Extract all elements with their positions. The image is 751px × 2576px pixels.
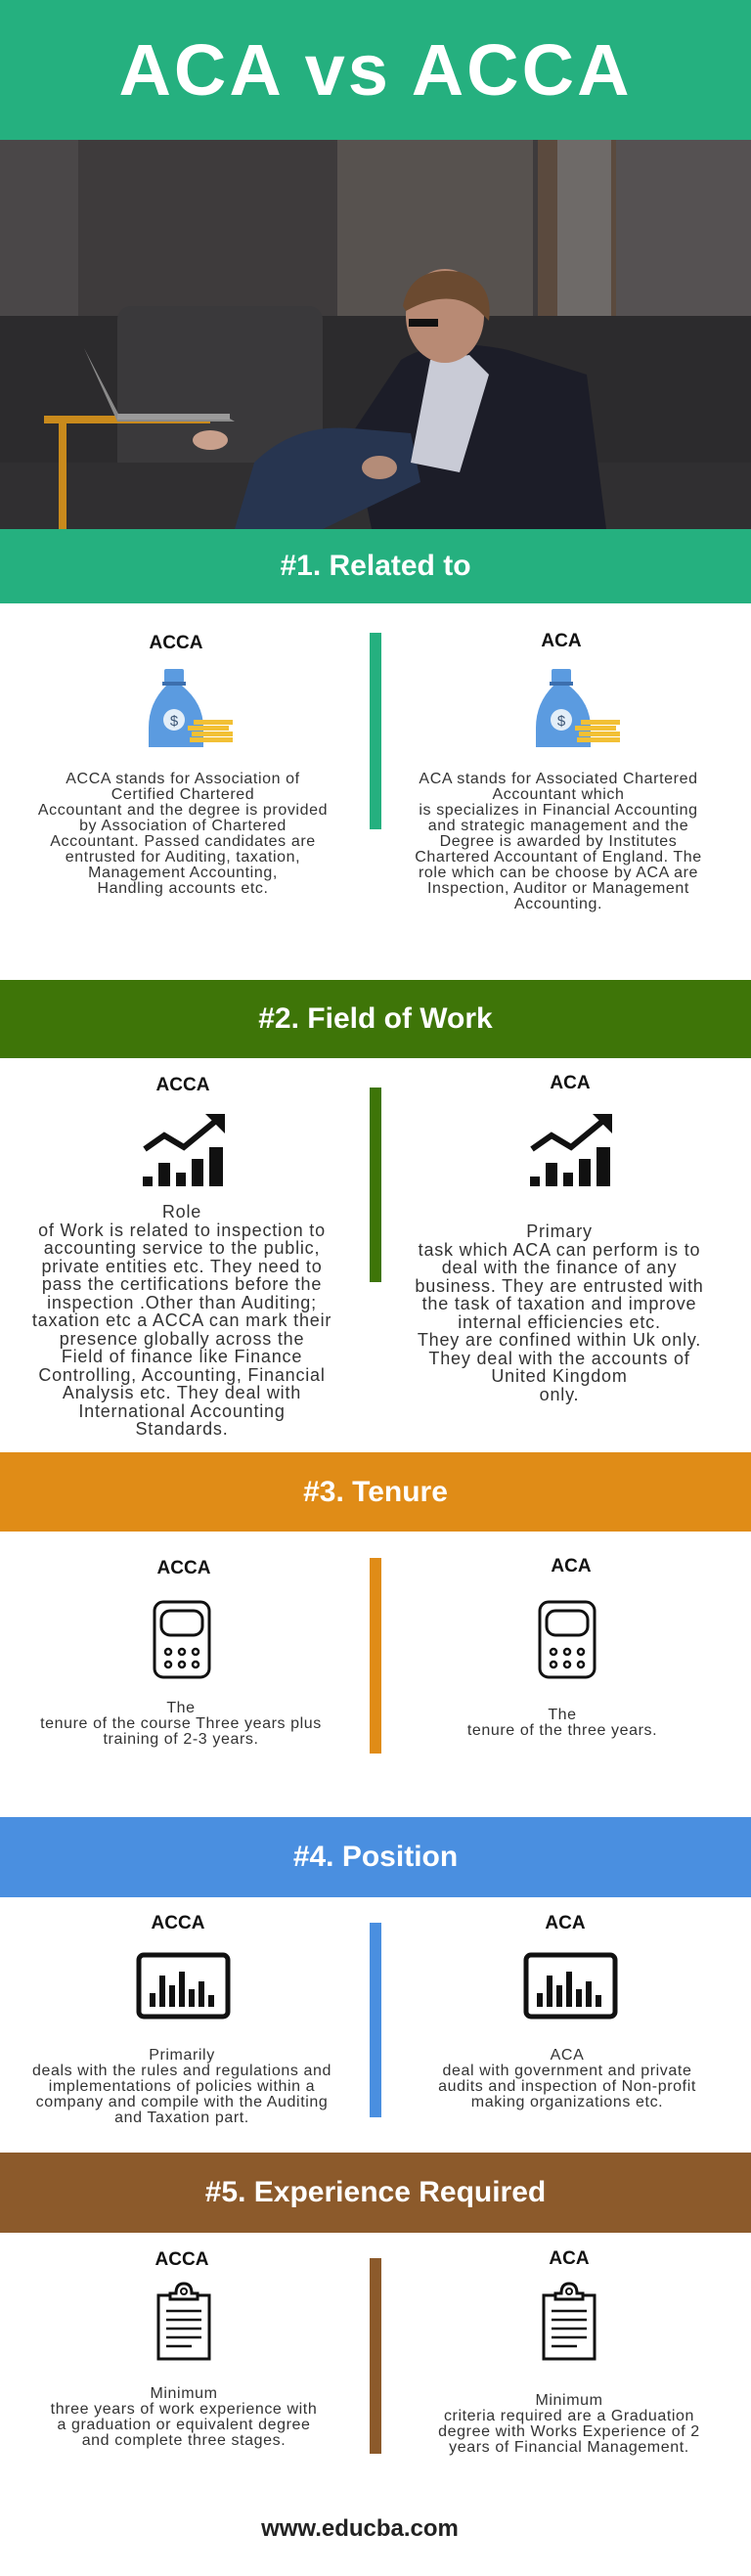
text ACA bbox=[438, 2047, 696, 2110]
icon: money bag: $ bbox=[557, 713, 566, 730]
divider bbox=[370, 633, 381, 829]
icon: clipboard bbox=[542, 2283, 596, 2361]
section 3 content bbox=[40, 1556, 657, 1754]
text ACCA: Analysis etc. They deal with bbox=[63, 1383, 301, 1402]
section 4 header: #4. Position bbox=[293, 1841, 458, 1873]
section 1 content bbox=[38, 631, 702, 912]
text ACCA: inspection .Other than Auditing; bbox=[47, 1293, 317, 1312]
text ACCA: deals with the rules and regulations and bbox=[32, 2063, 331, 2079]
text ACCA: Management Accounting, bbox=[88, 865, 278, 881]
divider bbox=[370, 1088, 381, 1282]
text ACA: tenure of the three years. bbox=[467, 1722, 657, 1739]
icon: calculator bbox=[153, 1600, 211, 1678]
text ACA: is specializes in Financial Accounting bbox=[419, 802, 698, 819]
text ACCA: private entities etc. They need to bbox=[41, 1256, 323, 1275]
section 5 header bbox=[0, 2153, 751, 2233]
text ACA: Inspection, Auditor or Management bbox=[427, 880, 689, 897]
text ACA: Accounting. bbox=[514, 896, 602, 912]
text ACCA: a graduation or equivalent degree bbox=[57, 2417, 311, 2433]
text ACCA: Field of finance like Finance bbox=[62, 1347, 302, 1366]
text ACA bbox=[415, 1221, 704, 1404]
icon: money bag bbox=[149, 669, 233, 747]
label ACA: ACA bbox=[551, 1556, 592, 1577]
text ACCA: pass the certifications before the bbox=[42, 1274, 322, 1294]
text ACA: the task of taxation and improve bbox=[422, 1294, 696, 1313]
text ACCA: and Taxation part. bbox=[114, 2110, 249, 2126]
text ACA bbox=[438, 2392, 700, 2456]
text ACCA: Primarily bbox=[149, 2047, 215, 2064]
text ACCA: ACCA stands for Association of bbox=[66, 771, 300, 787]
divider bbox=[370, 2258, 381, 2454]
section 1 header bbox=[0, 529, 751, 603]
text ACA: role which can be choose by ACA are bbox=[419, 865, 698, 881]
text ACA: Chartered Accountant of England. The bbox=[415, 849, 702, 866]
section 2 header bbox=[0, 980, 751, 1058]
label ACCA: ACCA bbox=[152, 1913, 204, 1933]
icon: bar chart frame bbox=[137, 1952, 231, 2019]
text ACCA bbox=[32, 1202, 331, 1439]
text ACCA: and complete three stages. bbox=[82, 2432, 286, 2449]
section 3 header: #3. Tenure bbox=[303, 1476, 448, 1508]
text ACCA: Certified Chartered bbox=[111, 786, 254, 803]
text ACCA: Role bbox=[162, 1202, 201, 1221]
text ACA: United Kingdom bbox=[491, 1366, 628, 1386]
text ACCA: Accountant. Passed candidates are bbox=[50, 833, 316, 850]
text ACCA bbox=[40, 1700, 322, 1748]
text ACCA: implementations of policies within a bbox=[49, 2078, 315, 2095]
text ACCA: company and compile with the Auditing bbox=[36, 2094, 328, 2110]
text ACCA: by Association of Chartered bbox=[79, 818, 287, 834]
text ACA: years of Financial Management. bbox=[449, 2439, 689, 2456]
text ACA: They are confined within Uk only. bbox=[418, 1330, 701, 1350]
icon: clipboard bbox=[156, 2283, 211, 2361]
text ACA: degree with Works Experience of 2 bbox=[438, 2423, 700, 2440]
text ACA: task which ACA can perform is to bbox=[419, 1240, 700, 1260]
text ACCA: The bbox=[166, 1700, 196, 1716]
text ACCA: accounting service to the public, bbox=[44, 1238, 320, 1258]
icon: money bag bbox=[536, 669, 620, 747]
section 3 header bbox=[0, 1452, 751, 1532]
label ACCA: ACCA bbox=[157, 1558, 210, 1578]
icon: money bag: $ bbox=[170, 713, 179, 730]
hero photo: man with laptop on sofa bbox=[0, 140, 751, 529]
text ACCA: International Accounting bbox=[78, 1400, 286, 1420]
text ACCA: Controlling, Accounting, Financial bbox=[38, 1365, 326, 1385]
text ACA: Degree is awarded by Institutes bbox=[440, 833, 677, 850]
icon: growth chart bbox=[530, 1114, 612, 1186]
section 1 header: #1. Related to bbox=[280, 550, 471, 582]
text ACA: and strategic management and the bbox=[428, 818, 688, 834]
label ACCA: ACCA bbox=[156, 1075, 209, 1095]
text ACA: Minimum bbox=[535, 2392, 603, 2409]
section 5 content bbox=[51, 2248, 700, 2456]
text ACCA: entrusted for Auditing, taxation, bbox=[66, 849, 300, 866]
text ACA: business. They are entrusted with bbox=[415, 1275, 704, 1295]
text ACCA: tenure of the course Three years plus bbox=[40, 1715, 322, 1732]
title banner bbox=[0, 0, 751, 140]
text ACA: audits and inspection of Non-profit bbox=[438, 2078, 696, 2095]
text ACA bbox=[415, 771, 702, 912]
text ACA: ACA bbox=[551, 2047, 584, 2064]
label ACA: ACA bbox=[550, 1073, 591, 1093]
section 2 header: #2. Field of Work bbox=[258, 1002, 493, 1035]
text ACA: They deal with the accounts of bbox=[428, 1348, 690, 1367]
divider bbox=[370, 1923, 381, 2117]
section 5 header: #5. Experience Required bbox=[205, 2176, 546, 2208]
text ACCA: presence globally across the bbox=[60, 1328, 304, 1348]
section 2 content bbox=[32, 1073, 704, 1439]
text ACA: only. bbox=[540, 1385, 579, 1404]
text ACA: making organizations etc. bbox=[471, 2094, 663, 2110]
text ACA: Primary bbox=[526, 1221, 593, 1241]
label ACA: ACA bbox=[545, 1913, 586, 1933]
text ACCA: Accountant and the degree is provided bbox=[38, 802, 328, 819]
text ACA bbox=[467, 1707, 657, 1739]
icon: calculator bbox=[538, 1600, 596, 1678]
text ACCA: Standards. bbox=[135, 1419, 229, 1439]
text ACCA bbox=[51, 2385, 317, 2449]
text ACCA: taxation etc a ACCA can mark their bbox=[32, 1310, 331, 1330]
footer url: www.educba.com bbox=[261, 2515, 459, 2542]
text ACCA bbox=[32, 2047, 331, 2126]
text ACA: Accountant which bbox=[492, 786, 624, 803]
text ACCA: of Work is related to inspection to bbox=[38, 1221, 326, 1240]
text ACCA: Minimum bbox=[150, 2385, 218, 2402]
section 4 content bbox=[32, 1913, 696, 2126]
text ACA: internal efficiencies etc. bbox=[458, 1312, 661, 1332]
section 4 header bbox=[0, 1817, 751, 1897]
icon: growth chart bbox=[143, 1114, 225, 1186]
text ACA: The bbox=[548, 1707, 577, 1723]
label ACCA: ACCA bbox=[155, 2249, 208, 2270]
text ACCA: training of 2-3 years. bbox=[103, 1731, 259, 1748]
icon: bar chart frame bbox=[524, 1952, 618, 2019]
text ACCA: three years of work experience with bbox=[51, 2401, 317, 2418]
text ACA: criteria required are a Graduation bbox=[444, 2408, 694, 2424]
divider bbox=[370, 1558, 381, 1754]
label ACA: ACA bbox=[549, 2248, 590, 2269]
text ACCA bbox=[38, 771, 328, 897]
title banner: ACA vs ACCA bbox=[118, 29, 633, 111]
text ACCA: Handling accounts etc. bbox=[97, 880, 269, 897]
text ACA: deal with the finance of any bbox=[442, 1258, 677, 1277]
text ACA: deal with government and private bbox=[443, 2063, 691, 2079]
text ACA: ACA stands for Associated Chartered bbox=[419, 771, 698, 787]
label ACCA: ACCA bbox=[150, 633, 202, 653]
label ACA: ACA bbox=[541, 631, 582, 651]
